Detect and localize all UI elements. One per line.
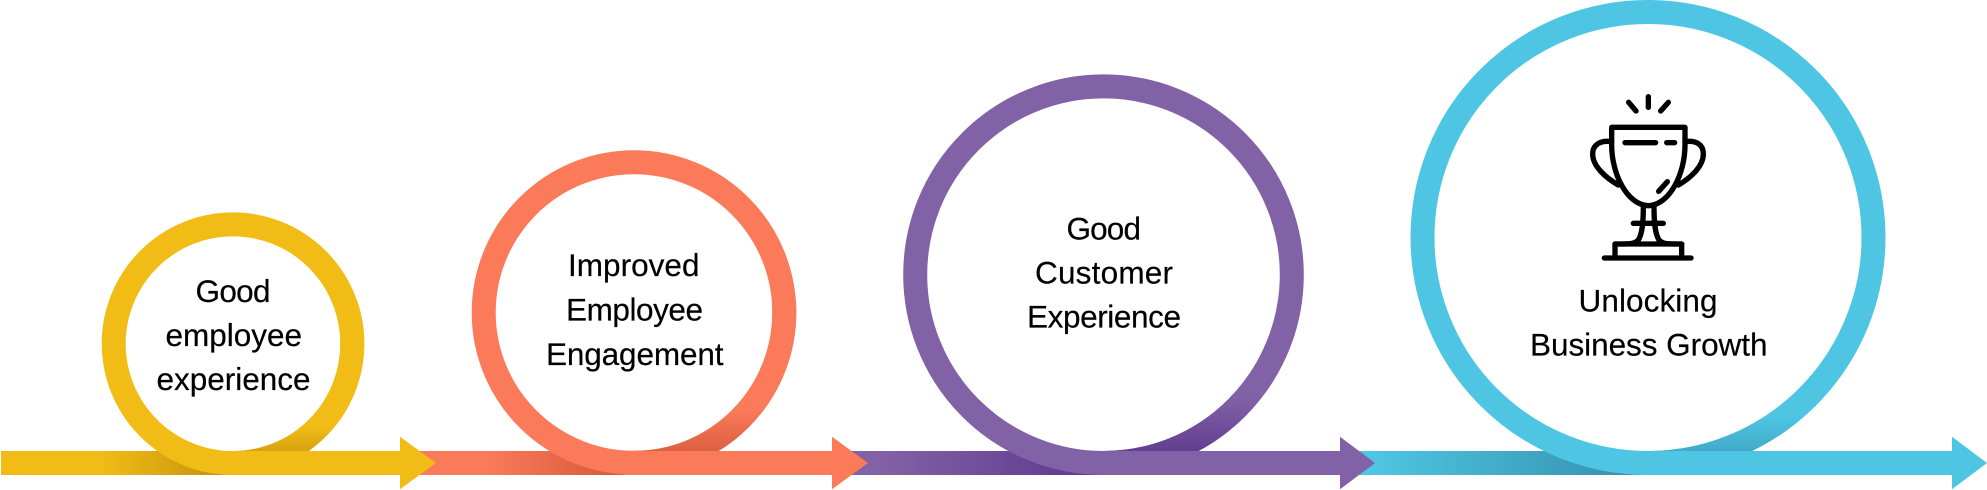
label: improved employee engagement: Improved [568,247,700,283]
label: unlocking business growth: Unlocking [1578,283,1718,319]
label: good customer experience: Good [1066,210,1141,246]
label: good employee experience [156,273,310,397]
label: good customer experience [1027,210,1181,335]
label: improved employee engagement [546,247,724,372]
ring shadow: purple [1104,300,1302,451]
label: good employee experience: experience [156,361,310,397]
arrow: yellow [225,437,436,489]
incoming band: purple [845,451,1110,475]
label: good employee experience: employee [166,317,302,353]
label: improved employee engagement: Engagement [546,336,724,372]
incoming band: orange [415,451,640,475]
loop ring: orange [484,162,784,463]
label: good customer experience: Experience [1027,299,1181,335]
label: good employee experience: Good [196,273,270,309]
label: improved employee engagement: Employee [566,291,703,327]
loop ring: purple [915,86,1292,463]
ring shadow: yellow [234,300,364,451]
incoming band: cyan [1355,451,1650,475]
step 2: improved employee engagement [415,162,868,489]
step 1: good employee experience [1,224,436,489]
label: unlocking business growth [1530,283,1768,363]
arrow: cyan [1640,437,1987,489]
label: unlocking business growth: Business Growth [1530,327,1768,363]
ring shadow: cyan [1652,300,1878,451]
arrow: orange [625,437,868,489]
ring shadow: orange [634,300,796,451]
label: good customer experience: Customer [1035,255,1173,291]
step 4: unlocking business growth [1355,12,1987,489]
incoming band: yellow [1,451,236,475]
loop ring: cyan [1422,12,1874,463]
arrow: purple [1100,437,1375,489]
loop ring: yellow [114,224,352,463]
icon: trophy [1593,97,1703,258]
step 3: good customer experience [845,86,1375,489]
